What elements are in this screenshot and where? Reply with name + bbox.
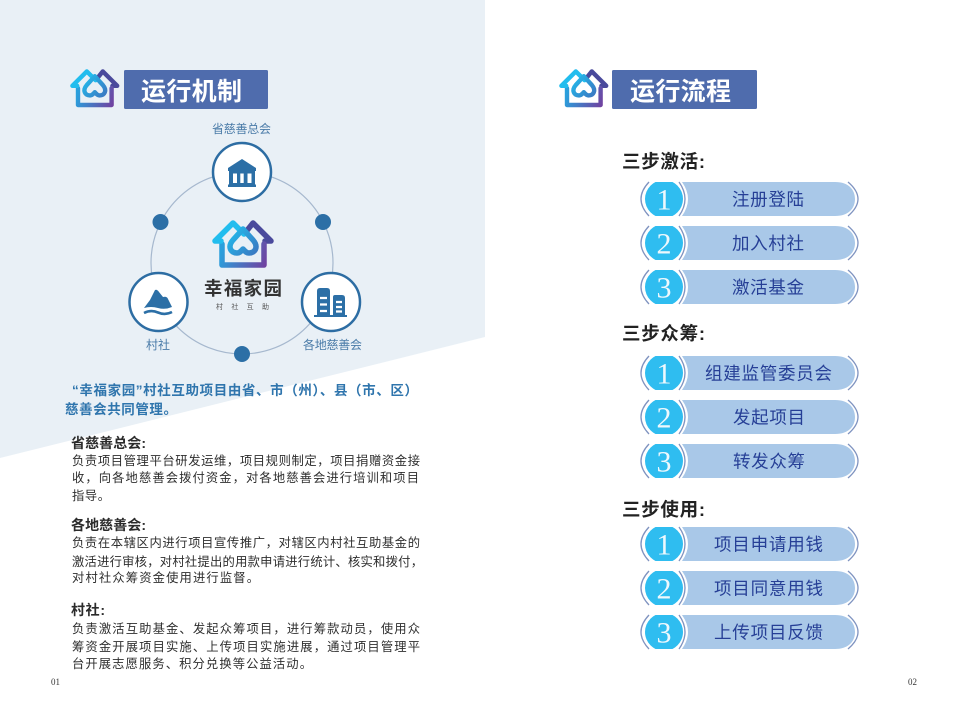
heading: 运行机制	[124, 70, 268, 109]
central brand text	[204, 278, 282, 311]
step button: 注册登陆	[641, 180, 858, 218]
text block: 省慈善总会: 负责项目管理平台研发运维，项目规则制定，项目捐赠资金接	[72, 453, 420, 468]
icon: left header logo	[72, 71, 117, 105]
diagram: three-level mechanism	[130, 121, 362, 362]
step button: 发起项目: 2	[656, 402, 672, 434]
step button: 组建监管委员会	[641, 354, 858, 392]
text block: 村社: 村社:	[71, 602, 105, 618]
text block: 各地慈善会: 负责在本辖区内进行项目宣传推广，对辖区内村社互助基金的	[72, 535, 420, 550]
step button: 转发众筹	[641, 442, 858, 480]
text block: 省慈善总会: 收，向各地慈善会拨付资金，对各地慈善会进行培训和项目	[72, 470, 419, 485]
step button: 发起项目: 发起项目	[733, 408, 805, 428]
section heading: 三步众筹: 三步众筹:	[622, 323, 705, 344]
step button: 激活基金: 3	[656, 272, 672, 304]
step button: 上传项目反馈	[641, 613, 858, 651]
heading: 运行流程	[612, 70, 757, 109]
text block: 各地慈善会	[71, 517, 423, 585]
text block: 各地慈善会: 激活进行审核，对村社提出的用款申请进行统计、核实和拨付，	[72, 554, 423, 569]
step button: 加入村社: 2	[656, 228, 672, 260]
step button: 注册登陆: 1	[656, 184, 672, 216]
intro text: “幸福家园”村社互助项目由省、市（州）、县（市、区）	[72, 382, 418, 398]
step button: 激活基金: 激活基金	[732, 278, 804, 298]
heading: 运行流程: 运行流程	[630, 78, 731, 106]
section heading: 三步使用: 三步使用:	[622, 499, 705, 520]
text block: 各地慈善会: 对村社众筹资金使用进行监督。	[72, 570, 259, 585]
central brand text: 幸福家园	[204, 278, 282, 299]
step button: 转发众筹: 转发众筹	[733, 452, 805, 472]
intro text	[65, 382, 418, 417]
node: 村社	[130, 273, 188, 352]
central brand text: 村社互助	[216, 302, 269, 311]
node: 省慈善总会: 省慈善总会	[212, 121, 271, 136]
step button: 项目同意用钱: 2	[656, 572, 672, 606]
icon: right header logo	[561, 71, 606, 105]
text block: 村社: 负责激活互助基金、发起众筹项目，进行筹款动员，使用众	[72, 621, 420, 636]
node: 省慈善总会	[212, 121, 271, 201]
node: 各地慈善会	[302, 273, 362, 352]
step button: 项目申请用钱: 1	[656, 528, 672, 562]
step button: 组建监管委员会: 组建监管委员会	[705, 364, 832, 384]
connector dots	[152, 214, 331, 362]
text block: 村社: 台开展志愿服务、积分兑换等公益活动。	[72, 656, 312, 671]
page number 01: 01	[51, 677, 60, 687]
text block: 省慈善总会	[71, 435, 420, 503]
step button: 组建监管委员会: 1	[656, 358, 672, 390]
text block: 省慈善总会: 省慈善总会:	[71, 435, 146, 451]
background panel: pale blue page corner	[0, 0, 485, 458]
node: 村社: 村社	[146, 337, 170, 352]
node: 各地慈善会: 各地慈善会	[303, 337, 362, 352]
icon: central logo	[215, 223, 271, 265]
step button: 转发众筹: 3	[656, 446, 672, 478]
text block: 村社	[71, 602, 420, 671]
step button: 加入村社	[641, 224, 858, 262]
step button: 上传项目反馈: 上传项目反馈	[714, 622, 823, 642]
step button: 项目申请用钱: 项目申请用钱	[714, 534, 823, 554]
step button: 上传项目反馈: 3	[656, 616, 672, 650]
page number 02: 02	[908, 677, 917, 687]
step button: 项目同意用钱: 项目同意用钱	[714, 578, 823, 598]
step button: 项目同意用钱	[641, 569, 858, 607]
step button: 发起项目	[641, 398, 858, 436]
step button: 激活基金	[641, 268, 858, 306]
text block: 各地慈善会: 各地慈善会:	[71, 517, 146, 533]
step button: 项目申请用钱	[641, 525, 858, 563]
heading: 运行机制: 运行机制	[141, 78, 242, 106]
text block: 村社: 筹资金开展项目实施、上传项目实施进展，通过项目管理平	[72, 639, 420, 654]
text block: 省慈善总会: 指导。	[72, 488, 110, 503]
intro text: 慈善会共同管理。	[65, 401, 177, 417]
section heading: 三步激活: 三步激活:	[622, 151, 705, 172]
step button: 注册登陆: 注册登陆	[732, 190, 804, 210]
step button: 加入村社: 加入村社	[732, 234, 804, 254]
